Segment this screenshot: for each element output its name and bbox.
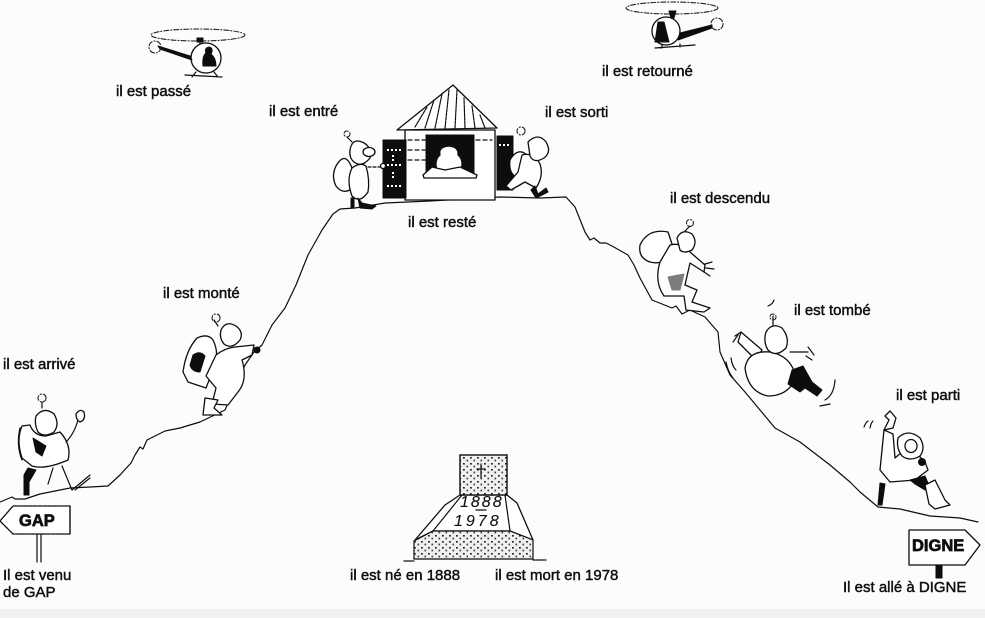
figure: il est parti (864, 411, 950, 509)
figure: il est monté (183, 314, 260, 415)
figure: il est descendu (640, 220, 714, 312)
label: il est parti: il est parti (896, 387, 960, 404)
label: il est tombé: il est tombé (794, 302, 871, 319)
window with person (426, 135, 474, 173)
sign label: GAP: GAP (19, 512, 55, 530)
label: il est mort en 1978: il est mort en 1978 (495, 567, 618, 584)
label: il est retourné: il est retourné (602, 63, 693, 80)
helicopter: il est retourné (626, 2, 723, 48)
label: il est descendu: il est descendu (670, 190, 770, 207)
label: il est né en 1888: il est né en 1888 (350, 567, 460, 584)
house walls (405, 130, 495, 200)
right door (497, 136, 513, 190)
label: Il est venu de GAP: de GAP (3, 584, 56, 601)
label: il est passé: il est passé (116, 83, 191, 100)
label: il est arrivé: il est arrivé (3, 356, 76, 373)
figure: il est arrivé (18, 394, 90, 495)
label: il est monté: il est monté (163, 285, 240, 302)
helicopter: il est passé (149, 29, 245, 77)
sign: GAP (0, 506, 70, 562)
death year: 1978 (454, 513, 502, 530)
stone slab (415, 495, 533, 540)
stone base (414, 531, 533, 559)
roof (397, 85, 497, 130)
figure: il est sorti (506, 127, 549, 198)
label: Il est venu de GAP: Il est venu (3, 567, 71, 584)
tombstone (404, 455, 546, 561)
house (383, 85, 513, 200)
cross (477, 464, 485, 478)
headstone (460, 455, 507, 495)
figure: il est entré (334, 131, 386, 209)
label: il est sorti: il est sorti (545, 104, 608, 121)
label: il est entré: il est entré (269, 103, 338, 120)
sign: DIGNE (909, 530, 980, 578)
sign label: DIGNE: DIGNE (912, 537, 964, 555)
mountain ridge line (0, 197, 978, 522)
label: Il est allé à DIGNE: Il est allé à DIGNE (843, 579, 966, 596)
birth year: 1888 (460, 494, 504, 511)
left door (383, 140, 406, 198)
figure: il est tombé (726, 300, 835, 406)
label: il est resté: il est resté (408, 214, 476, 231)
